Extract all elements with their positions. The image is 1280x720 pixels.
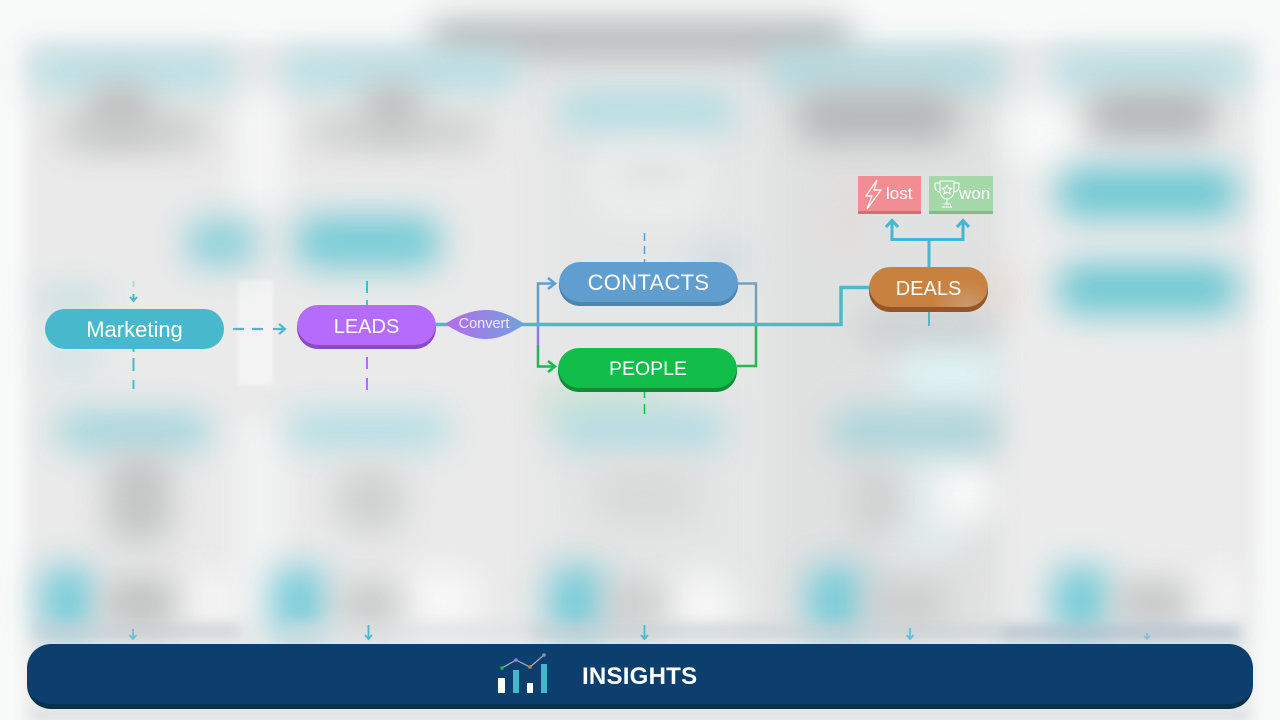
arrow: marketing incoming bbox=[130, 281, 137, 301]
line: convert to deals bbox=[436, 288, 870, 324]
icon: bar and line chart bbox=[498, 653, 547, 693]
arrow: to people bbox=[538, 325, 555, 372]
node: DEALS: DEALS bbox=[896, 278, 961, 300]
node: Marketing bbox=[45, 309, 224, 349]
arrows: deals to lost and won bbox=[886, 220, 969, 267]
icon: trophy bbox=[934, 180, 960, 208]
arrow: marketing to leads bbox=[233, 324, 285, 334]
connector: contacts and people merge bbox=[737, 284, 756, 366]
node: LEADS bbox=[297, 305, 436, 349]
arrows: down to insights bbox=[128, 625, 1150, 640]
dashed line: leads up bbox=[366, 281, 368, 305]
node: PEOPLE: PEOPLE bbox=[609, 358, 687, 380]
node: DEALS bbox=[869, 267, 988, 312]
node: PEOPLE bbox=[558, 348, 737, 392]
dashed line: marketing down bbox=[132, 349, 134, 389]
icon: lightning bolt bbox=[865, 180, 882, 210]
tag: lost bbox=[858, 176, 921, 214]
node: Convert: Convert bbox=[459, 316, 509, 332]
label: won: won bbox=[959, 184, 990, 203]
node: CONTACTS: CONTACTS bbox=[588, 270, 709, 295]
label: lost: lost bbox=[886, 184, 912, 203]
node: Marketing: Marketing bbox=[86, 316, 183, 342]
arrow: to contacts bbox=[538, 278, 555, 325]
dashed line: leads down bbox=[366, 357, 368, 390]
label: INSIGHTS: INSIGHTS bbox=[582, 663, 697, 690]
dashed line: people down bbox=[644, 392, 646, 414]
banner: INSIGHTS bbox=[27, 644, 1253, 709]
node: CONTACTS bbox=[559, 262, 738, 306]
tag: won bbox=[929, 176, 993, 214]
dashed line: contacts up bbox=[644, 233, 646, 262]
node: Convert bbox=[445, 310, 525, 339]
node: LEADS: LEADS bbox=[334, 316, 399, 338]
dashed line: deals down bbox=[928, 312, 930, 326]
